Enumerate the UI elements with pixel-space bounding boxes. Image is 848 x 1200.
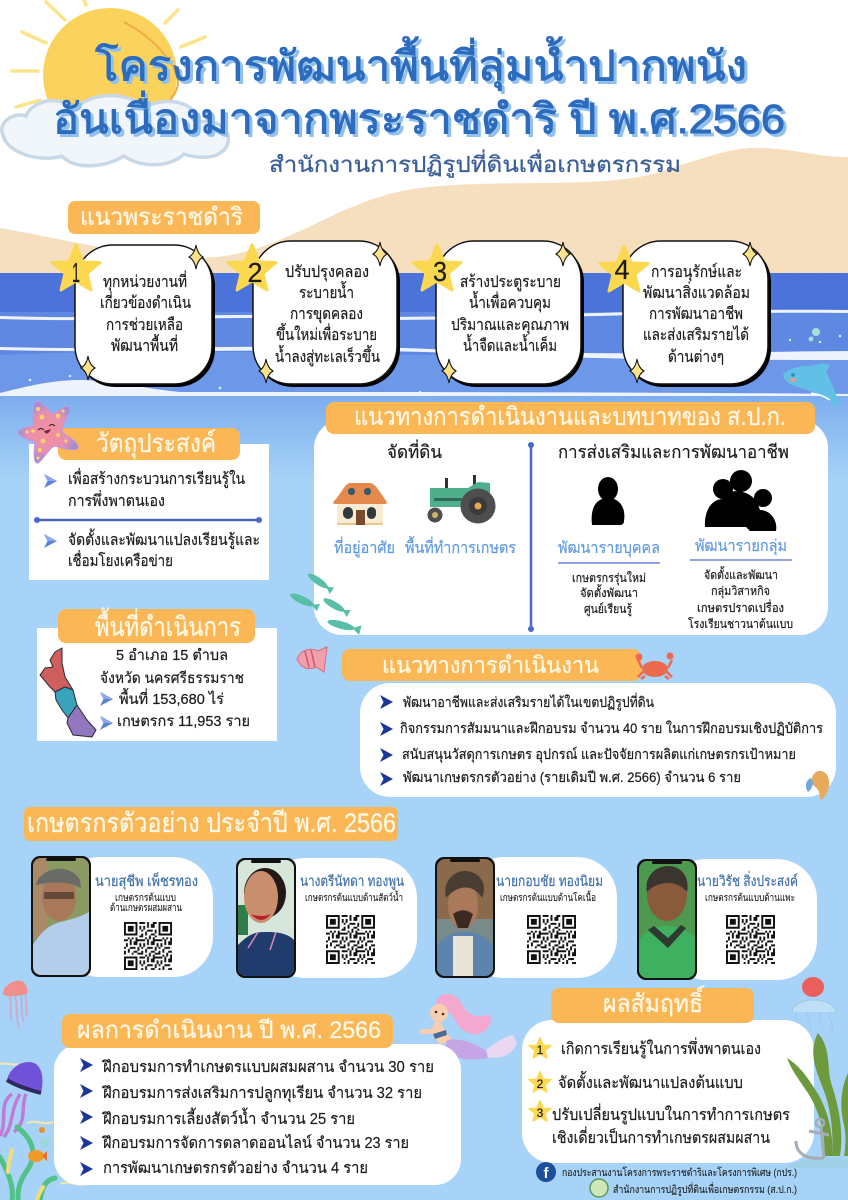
title: อันเนื่องมาจากพระราชดำริ ปี พ.ศ.2566: [53, 91, 785, 142]
icon: sun: [12, 0, 205, 142]
panel: initiative card 2: ระบายน้ำ: [299, 281, 354, 302]
icon: right seaweed: [787, 1033, 848, 1156]
title: โครงการพัฒนาพื้นที่ลุ่มน้ำปากพนัง: [98, 39, 750, 94]
panel: achievements: เชิงเดี่ยวเป็นการทำเกษตรผสมผสาน: [552, 1126, 770, 1147]
panel: initiative card 4: การพัฒนาอาชีพ: [649, 305, 743, 323]
heading: model farmers: เกษตรกรตัวอย่าง ประจำปี พ.ศ. 2566: [27, 808, 396, 838]
panel: results 2023: ฝึกอบรมการทำเกษตรแบบผสมผสาน จำนวน 30 ราย: [101, 1059, 434, 1076]
panel: initiative card 2: ปรับปรุงคลอง: [285, 264, 369, 282]
panel: farmer 3: เกษตรกรต้นแบบด้านโคเนื้อ: [500, 890, 596, 904]
panel: farmer 4: [637, 859, 817, 980]
panel: operating area: [37, 607, 277, 741]
panel: guidelines and ALRO roles: พัฒนารายบุคคล: [558, 540, 660, 558]
icon: goldfish: [28, 1127, 50, 1162]
footer: facebook credit: กองประสานงานโครงการพระราชดำริและโครงการพิเศษ (กปร.): [562, 1166, 797, 1179]
panel: initiative card 4: [600, 241, 771, 387]
panel: initiative card 3: 3: [433, 256, 447, 287]
panel: achievements: ปรับเปลี่ยนรูปแบบในการทำการเกษตร: [552, 1103, 790, 1125]
panel: initiative card 1: เกี่ยวข้องดำเนิน: [100, 291, 191, 312]
heading: royal initiative: แนวพระราชดำริ: [80, 204, 243, 231]
panel: operating guidelines: [342, 649, 836, 797]
panel: farmer 2: [236, 858, 417, 978]
panel: achievements: 2: [537, 1077, 544, 1091]
panel: results 2023: ผลการดำเนินงาน ปี พ.ศ. 2566: [77, 1017, 381, 1044]
panel: farmer 2: เกษตรกรต้นแบบด้านสัตว์น้ำ: [305, 890, 403, 904]
panel: guidelines and ALRO roles: พัฒนารายกลุ่ม: [695, 538, 787, 556]
panel: initiative card 3: น้ำเพื่อควบคุม: [469, 291, 551, 313]
panel: results 2023: ฝึกอบรมการจัดการตลาดออนไลน์ จำนวน 23 ราย: [102, 1134, 409, 1152]
panel: farmer 3: นายกอบชัย ทองนิยม: [496, 874, 603, 890]
panel: initiative card 3: [413, 241, 584, 387]
panel: operating area: พื้นที่ 153,680 ไร่: [119, 688, 224, 708]
panel: results 2023: ฝึกอบรมการเลี้ยงสัตว์น้ำ จำนวน 25 ราย: [101, 1107, 355, 1128]
subtitle: สำนักงานการปฏิรูปที่ดินเพื่อเกษตรกรรม: [269, 149, 681, 178]
panel: objectives: เพื่อสร้างกระบวนการเรียนรู้ใน: [68, 468, 245, 489]
title: [53, 36, 788, 145]
panel: farmer 4: เกษตรกรต้นแบบด้านแพะ: [705, 892, 795, 904]
panel: guidelines and ALRO roles: กลุ่มวิสาหกิจ: [711, 584, 770, 599]
panel: initiative card 4: 4: [614, 254, 630, 285]
footer: ALRO credit: [590, 1179, 797, 1197]
panel: guidelines and ALRO roles: จัดตั้งพัฒนา: [580, 584, 638, 600]
panel: farmer 1: ด้านเกษตรผสมผสาน: [110, 902, 182, 914]
icon: left seaweed: [0, 1127, 55, 1200]
icon: tractor: [428, 475, 496, 524]
panel: initiative card 2: 2: [248, 257, 262, 288]
panel: farmer 1: เกษตรกรต้นแบบ: [115, 892, 176, 904]
panel: initiative card 2: [228, 241, 400, 387]
panel: guidelines and ALRO roles: จัดที่ดิน: [387, 439, 442, 462]
panel: operating area: จังหวัด นครศรีธรรมราช: [100, 670, 244, 687]
panel: guidelines and ALRO roles: แนวทางการดำเนินงานและบทบาทของ ส.ป.ก.: [354, 403, 786, 431]
map of the project area: [40, 648, 96, 737]
panel: farmer 2: นางตรีนัทดา ทองพูน: [300, 873, 404, 890]
panel: initiative card 4: พัฒนาสิ่งแวดล้อม: [643, 281, 750, 302]
icon: house: [333, 483, 387, 525]
panel: initiative card 4: ด้านต่างๆ: [668, 348, 724, 366]
panel: initiative card 4: การอนุรักษ์และ: [651, 262, 742, 282]
panel: guidelines and ALRO roles: การส่งเสริมและการพัฒนาอาชีพ: [558, 442, 789, 462]
panel: farmer 4: นายวิรัช สิ่งประสงค์: [697, 871, 798, 890]
panel: guidelines and ALRO roles: เกษตรปราดเปรื่อง: [697, 599, 784, 615]
panel: farmer 3: [435, 857, 617, 978]
panel: guidelines and ALRO roles: เกษตรกรรุ่นใหม่: [572, 571, 646, 586]
icon: mermaid: [420, 994, 517, 1060]
panel: objectives: [29, 428, 269, 580]
panel: guidelines and ALRO roles: ศูนย์เรียนรู้: [584, 602, 632, 617]
icon: faded octopus jellyfish: [792, 977, 836, 1030]
panel: objectives: การพึ่งพาตนเอง: [68, 490, 165, 510]
panel: guidelines and ALRO roles: จัดตั้งและพัฒนา: [704, 566, 778, 582]
footer: facebook credit: f: [544, 1165, 550, 1182]
panel: farmer 1: [31, 856, 213, 977]
panel: operating guidelines: พัฒนาเกษตรกรตัวอย่าง (รายเดิมปี พ.ศ. 2566) จำนวน 6 ราย: [403, 769, 741, 785]
icon: group of people: [705, 470, 776, 531]
panel: initiative card 3: ปริมาณและคุณภาพ: [451, 317, 569, 335]
panel: achievements: [522, 985, 814, 1163]
icon: red striped fish: [297, 647, 327, 672]
panel: operating area: พื้นที่ดำเนินการ: [95, 607, 241, 642]
panel: operating guidelines: แนวทางการดำเนินงาน: [382, 652, 599, 678]
panel: operating area: 5 อำเภอ 15 ตำบล: [116, 647, 228, 664]
panel: initiative card 1: 1: [72, 257, 80, 288]
icon: cloud: [2, 96, 228, 166]
icon: anchor: [785, 1119, 848, 1168]
icon: fish school: [289, 571, 362, 635]
panel: guidelines and ALRO roles: โรงเรียนชาวนาต้นแบบ: [688, 617, 793, 631]
panel: results 2023: ฝึกอบรมการส่งเสริมการปลูกทุเรียน จำนวน 32 ราย: [101, 1085, 422, 1103]
panel: initiative card 1: พัฒนาพื้นที่: [111, 334, 178, 355]
panel: initiative card 2: ขึ้นใหม่เพื่อระบาย: [276, 323, 377, 344]
panel: achievements: จัดตั้งและพัฒนาแปลงต้นแบบ: [558, 1071, 743, 1092]
title: โครงการพัฒนาพื้นที่ลุ่มน้ำปากพนัง: [95, 36, 747, 91]
panel: objectives: จัดตั้งและพัฒนาแปลงเรียนรู้และ: [68, 528, 260, 550]
panel: initiative card 4: และส่งเสริมรายได้: [643, 325, 749, 344]
panel: initiative card 3: น้ำจืดและน้ำเค็ม: [463, 334, 557, 355]
panel: initiative card 1: การช่วยเหลือ: [106, 316, 183, 334]
panel: achievements: 3: [537, 1106, 544, 1120]
panel: initiative card 1: [52, 245, 215, 387]
panel: initiative card 2: น้ำลงสู่ทะเลเร็วขึ้น: [275, 345, 380, 367]
icon: starfish: [18, 402, 78, 463]
panel: achievements: 1: [537, 1043, 544, 1057]
icon: dolphin: [783, 364, 840, 407]
panel: initiative card 3: สร้างประตูระบาย: [460, 273, 561, 292]
panel: operating guidelines: พัฒนาอาชีพและส่งเสริมรายได้ในเขตปฏิรูปที่ดิน: [403, 693, 654, 711]
panel: operating guidelines: สนับสนุนวัสดุการเกษตร อุปกรณ์ และปัจจัยการผลิตแก่เกษตรกรเป้าหมาย: [402, 746, 796, 763]
panel: achievements: เกิดการเรียนรู้ในการพึ่งพาตนเอง: [561, 1037, 761, 1059]
icon: seahorse: [806, 771, 829, 800]
footer: facebook credit: [536, 1162, 797, 1182]
panel: farmer 1: นายสุชีพ เพ็ชรทอง: [95, 871, 198, 890]
panel: achievements: ผลสัมฤทธิ์: [603, 985, 705, 1018]
icon: person: [592, 477, 624, 525]
panel: guidelines and ALRO roles: พื้นที่ทำการเกษตร: [405, 536, 516, 557]
title: อันเนื่องมาจากพระราชดำริ ปี พ.ศ.2566: [56, 94, 788, 145]
panel: objectives: วัตถุประสงค์: [96, 428, 216, 459]
panel: guidelines and ALRO roles: [314, 402, 828, 635]
panel: results 2023: การพัฒนาเกษตรกรตัวอย่าง จำนวน 4 ราย: [103, 1160, 368, 1177]
footer: ALRO credit: สำนักงานการปฏิรูปที่ดินเพื่อเกษตรกรรม (ส.ป.ก.): [613, 1182, 797, 1196]
icon: pink jellyfish: [3, 981, 27, 1028]
panel: initiative card 2: การขุดคลอง: [290, 306, 363, 324]
panel: objectives: เชื่อมโยงเครือข่าย: [68, 550, 173, 570]
panel: operating area: เกษตรกร 11,953 ราย: [117, 713, 250, 730]
icon: crab: [636, 652, 674, 679]
panel: results 2023: [54, 1014, 461, 1185]
panel: initiative card 1: ทุกหน่วยงานที่: [103, 270, 187, 292]
panel: guidelines and ALRO roles: ที่อยู่อาศัย: [334, 536, 395, 558]
icon: purple jellyfish: [0, 1062, 87, 1185]
